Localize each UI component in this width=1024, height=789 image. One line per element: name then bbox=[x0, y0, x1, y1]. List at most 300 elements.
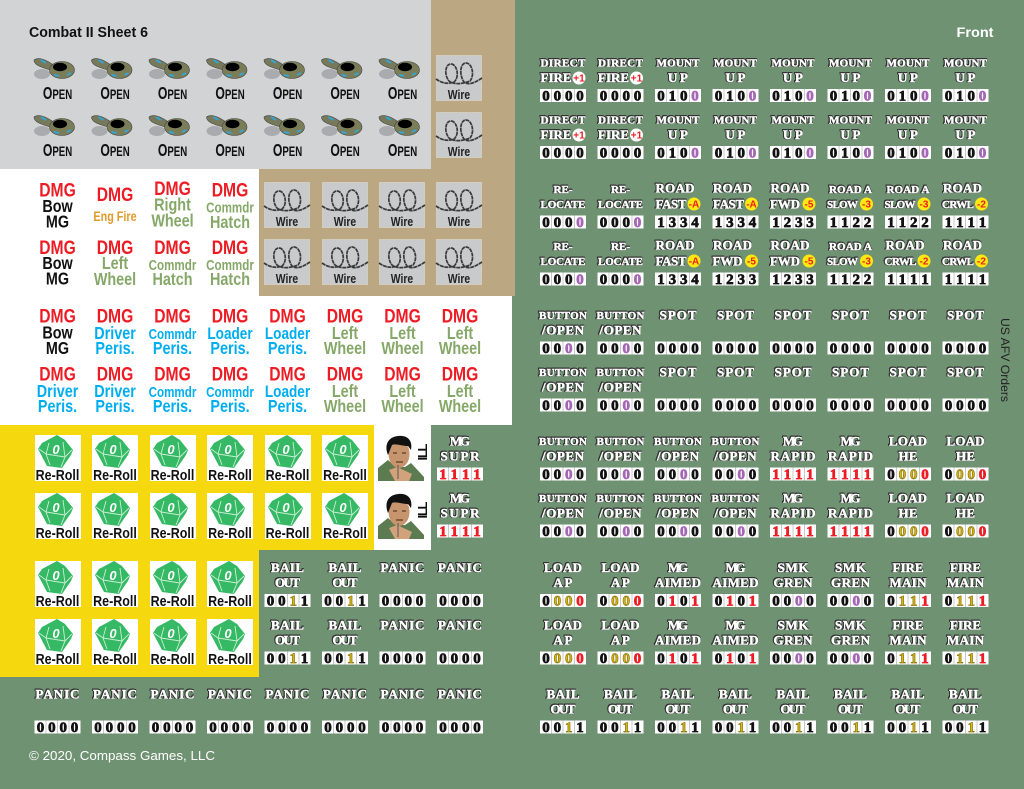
row 10: load AP, MG aimed, smoke, fire main: 0 11 1 bbox=[887, 651, 929, 667]
row 8: button open, MG rapid, load HE: /OPEN bbox=[598, 506, 642, 520]
row 1: direct fire and mount up: 010 0 bbox=[657, 88, 699, 104]
wire counters: Wire bbox=[334, 215, 357, 229]
damage counters: Commdr bbox=[206, 257, 254, 273]
row 1: direct fire and mount up: MOUNT bbox=[829, 58, 873, 70]
panel: gray hatch area bbox=[0, 0, 431, 169]
counter: Bail Out: BAIL bbox=[271, 560, 304, 575]
row 6: button open and spot: 00 0 0 bbox=[542, 398, 584, 414]
row 11: bail out: OUT bbox=[780, 702, 806, 716]
row 11: bail out: BAIL bbox=[546, 686, 580, 702]
row 2: direct fire and mount up: FIRE bbox=[598, 127, 629, 142]
damage counters: DMG bbox=[212, 363, 248, 385]
open hatch counters: OPEN bbox=[158, 141, 187, 161]
row 9: load AP, MG aimed, smoke, fire main: 0 00 0 bbox=[600, 594, 641, 610]
counter: MG Supr bbox=[437, 490, 483, 540]
counter: Panic bbox=[92, 686, 138, 736]
damage counters: DMG bbox=[154, 305, 191, 327]
row 9: load AP, MG aimed, smoke, fire main: LOAD bbox=[544, 560, 582, 575]
row 9: load AP, MG aimed, smoke, fire main: AIMED bbox=[712, 575, 758, 590]
row 11: bail out: 00 1 1 bbox=[542, 720, 584, 736]
wire counters: Wire bbox=[448, 88, 471, 102]
copyright: © 2020, Compass Games, LLC bbox=[29, 748, 215, 763]
row 4: relocate and road movement: 1122 bbox=[830, 272, 871, 288]
row 4: relocate and road movement: ROAD A bbox=[829, 241, 872, 253]
counter: Panic: PANIC bbox=[438, 618, 482, 632]
row 7: button open, MG rapid, load HE: RAPID bbox=[770, 448, 816, 464]
row 11: bail out: 00 1 1 bbox=[715, 720, 756, 736]
damage counters: Left bbox=[447, 324, 474, 343]
row 7: button open, MG rapid, load HE: BUTTON bbox=[596, 436, 645, 448]
damage counters: DMG bbox=[154, 177, 191, 199]
open hatch counters: OPEN bbox=[100, 141, 130, 161]
row 8: button open, MG rapid, load HE: /OPEN bbox=[714, 506, 757, 520]
damage counters: DMG bbox=[154, 236, 191, 258]
row 3: relocate and road movement: RE- bbox=[554, 184, 573, 196]
damage counters: Peris. bbox=[95, 339, 135, 358]
row 9: load AP, MG aimed, smoke, fire main: 00 0 0 bbox=[830, 594, 871, 610]
row 11: bail out: 00 1 1 bbox=[772, 720, 814, 736]
row 3: relocate and road movement: 1334 bbox=[715, 215, 757, 231]
row 3: relocate and road movement: ROAD bbox=[656, 180, 694, 196]
damage counters: Wheel bbox=[381, 397, 424, 416]
row 11: bail out: OUT bbox=[608, 702, 633, 716]
open hatch counters: OPEN bbox=[330, 141, 360, 161]
row 6: button open and spot: 0000 bbox=[830, 398, 871, 414]
damage counters: Left bbox=[332, 382, 359, 401]
row 4: relocate and road movement: ROAD bbox=[656, 238, 694, 252]
counter: Bail Out: OUT bbox=[332, 632, 358, 648]
row 3: relocate and road movement: SLOW bbox=[884, 199, 916, 211]
damage counters: Driver bbox=[94, 324, 136, 343]
wire counters: Wire bbox=[276, 272, 299, 286]
damage counters: DMG bbox=[39, 363, 76, 385]
damage counters: DMG bbox=[327, 305, 363, 327]
row 2: direct fire and mount up: 010 0 bbox=[830, 146, 871, 162]
row 4: relocate and road movement: ROAD bbox=[713, 238, 752, 252]
damage counters: Peris. bbox=[153, 339, 192, 358]
row 10: load AP, MG aimed, smoke, fire main: MG bbox=[726, 618, 746, 632]
counter: Panic: PANIC bbox=[150, 686, 194, 702]
row 7: button open, MG rapid, load HE: /OPEN bbox=[598, 448, 642, 464]
damage counters: Driver bbox=[37, 382, 79, 401]
row 1: direct fire and mount up: MOUNT bbox=[656, 58, 700, 70]
ill crew counters bbox=[378, 435, 430, 539]
row 8: button open, MG rapid, load HE: 1111 bbox=[772, 524, 814, 540]
row 3: relocate and road movement: ROAD A bbox=[886, 184, 930, 196]
row 8: button open, MG rapid, load HE: 00 0 0 bbox=[600, 524, 641, 540]
wire counters: Wire bbox=[448, 272, 471, 286]
row 7: button open, MG rapid, load HE: 00 0 0 bbox=[657, 467, 699, 483]
wire counters: Wire bbox=[334, 272, 357, 286]
row 4: relocate and road movement: SLOW bbox=[827, 256, 858, 268]
row 3: relocate and road movement: ROAD bbox=[713, 180, 752, 196]
row 3: relocate and road movement: -A bbox=[689, 200, 699, 210]
row 2: direct fire and mount up: UP bbox=[840, 127, 861, 142]
counter: Panic: PANIC bbox=[266, 686, 310, 702]
row 4: relocate and road movement: FAST bbox=[656, 254, 687, 268]
row 5: button open and spot: 00 0 0 bbox=[542, 341, 584, 357]
row 11: bail out: OUT bbox=[666, 702, 691, 716]
damage counters: Wheel bbox=[439, 339, 481, 358]
counter: Panic: 0000 bbox=[152, 720, 193, 736]
re-roll counters: Re-Roll bbox=[151, 525, 194, 541]
row 8: button open, MG rapid, load HE: MG bbox=[783, 490, 803, 506]
row 11: bail out: OUT bbox=[550, 702, 576, 716]
row 7: button open, MG rapid, load HE: /OPEN bbox=[541, 448, 585, 464]
row 8: button open, MG rapid, load HE: HE bbox=[956, 506, 975, 520]
damage counters: Wheel bbox=[324, 397, 366, 416]
damage counters: Right bbox=[154, 195, 191, 215]
open hatch counters: OPEN bbox=[215, 84, 245, 104]
row 10: load AP, MG aimed, smoke, fire main: 0 11 1 bbox=[945, 651, 986, 667]
row 9: load AP, MG aimed, smoke, fire main: 0 11 1 bbox=[945, 594, 986, 610]
row 1: direct fire and mount up: MOUNT bbox=[886, 58, 930, 70]
row 9: load AP, MG aimed, smoke, fire main: LOAD bbox=[602, 560, 640, 575]
row 6: button open and spot: SPOT bbox=[774, 364, 812, 380]
row 6: button open and spot: SPOT bbox=[890, 364, 927, 380]
row 3: relocate and road movement: 000 0 bbox=[542, 215, 584, 231]
row 9: load AP, MG aimed, smoke, fire main: 0 11 1 bbox=[887, 594, 929, 610]
row 8: button open, MG rapid, load HE: LOAD bbox=[946, 490, 984, 506]
damage counters bbox=[37, 177, 481, 416]
row 3: relocate and road movement: RE- bbox=[611, 184, 630, 196]
row 1: direct fire and mount up bbox=[540, 58, 988, 104]
counter: Bail Out: OUT bbox=[275, 575, 300, 590]
row 6: button open and spot: SPOT bbox=[660, 364, 697, 380]
damage counters: Left bbox=[389, 382, 416, 401]
row 10: load AP, MG aimed, smoke, fire main: MG bbox=[668, 618, 688, 632]
row 9: load AP, MG aimed, smoke, fire main: AP bbox=[611, 575, 630, 590]
counter: Panic: 0000 bbox=[267, 720, 308, 736]
row 3: relocate and road movement: 1111 bbox=[945, 215, 986, 231]
row 1: direct fire and mount up: FIRE bbox=[598, 70, 629, 85]
re-roll counters: Re-Roll bbox=[93, 467, 137, 483]
row 2: direct fire and mount up: 010 0 bbox=[715, 146, 756, 162]
wire counters: Wire bbox=[391, 272, 414, 286]
damage counters: Commdr bbox=[206, 384, 254, 400]
row 10: load AP, MG aimed, smoke, fire main: AIMED bbox=[655, 632, 701, 648]
damage counters: Commdr bbox=[206, 199, 254, 216]
re-roll counters bbox=[35, 435, 368, 667]
title: Combat II Sheet 6 bbox=[29, 25, 148, 41]
row 1: direct fire and mount up: MOUNT bbox=[944, 58, 988, 70]
row 4: relocate and road movement: FWD bbox=[770, 254, 800, 268]
row 10: load AP, MG aimed, smoke, fire main: 0 00 0 bbox=[542, 651, 584, 667]
row 8: button open, MG rapid, load HE: BUTTON bbox=[712, 493, 760, 505]
panel: white damage area bbox=[0, 169, 512, 425]
row 10: load AP, MG aimed, smoke, fire main: 00 0 0 bbox=[772, 651, 814, 667]
damage counters: Peris. bbox=[153, 397, 192, 416]
row 7: button open, MG rapid, load HE: MG bbox=[840, 434, 860, 448]
open hatch counters: OPEN bbox=[273, 141, 302, 161]
row 5: button open and spot: BUTTON bbox=[539, 310, 587, 322]
row 7: button open, MG rapid, load HE: BUTTON bbox=[712, 436, 760, 448]
damage counters: Bow bbox=[42, 197, 73, 216]
counter: Panic: 0000 bbox=[382, 651, 423, 667]
row 11: bail out: 00 1 1 bbox=[945, 720, 986, 736]
row 4: relocate and road movement bbox=[540, 238, 988, 288]
row 1: direct fire and mount up: 010 0 bbox=[945, 88, 986, 104]
row 3: relocate and road movement: LOCATE bbox=[598, 199, 643, 211]
side label: US AFV Orders: US AFV Orders bbox=[998, 318, 1012, 402]
row 3: relocate and road movement: FWD bbox=[770, 196, 800, 212]
re-roll counters: Re-Roll bbox=[93, 525, 137, 541]
row 5: button open and spot: /OPEN bbox=[598, 322, 642, 338]
row 10: load AP, MG aimed, smoke, fire main: FIRE bbox=[892, 618, 924, 632]
row 3: relocate and road movement: 1122 bbox=[887, 215, 929, 231]
row 4: relocate and road movement: RE- bbox=[554, 241, 573, 253]
row 3: relocate and road movement: ROAD A bbox=[829, 184, 872, 196]
counter: Bail Out bbox=[264, 560, 310, 610]
row 1: direct fire and mount up: UP bbox=[840, 70, 861, 85]
row 1: direct fire and mount up: UP bbox=[956, 70, 976, 85]
counter: Panic: 0000 bbox=[37, 720, 78, 736]
wire counters: Wire bbox=[448, 145, 471, 159]
counter: Panic: PANIC bbox=[323, 686, 367, 702]
row 3: relocate and road movement: FAST bbox=[656, 196, 687, 212]
re-roll counters: Re-Roll bbox=[36, 525, 79, 541]
row 4: relocate and road movement: -2 bbox=[977, 256, 986, 268]
counter: MG Supr: MG bbox=[450, 490, 470, 506]
row 2: direct fire and mount up: +1 bbox=[631, 130, 643, 142]
counter: Panic: 0000 bbox=[382, 594, 423, 610]
row 4: relocate and road movement: ROAD bbox=[770, 238, 810, 252]
damage counters: Left bbox=[332, 324, 359, 343]
counter: Bail Out: BAIL bbox=[328, 560, 362, 575]
damage counters: Peris. bbox=[210, 339, 250, 358]
counter: Panic: 0000 bbox=[439, 720, 481, 736]
counter: Panic: PANIC bbox=[438, 686, 482, 702]
damage counters: Hatch bbox=[153, 270, 192, 289]
re-roll counters: Re-Roll bbox=[151, 467, 194, 483]
row 2: direct fire and mount up: MOUNT bbox=[714, 114, 758, 126]
row 9: load AP, MG aimed, smoke, fire main: FIRE bbox=[892, 560, 924, 575]
damage counters: MG bbox=[46, 212, 69, 232]
row 4: relocate and road movement: 1334 bbox=[657, 272, 699, 288]
row 9: load AP, MG aimed, smoke, fire main bbox=[540, 560, 988, 610]
counter: Panic: PANIC bbox=[380, 686, 424, 702]
row 6: button open and spot: 0000 bbox=[715, 398, 756, 414]
row 4: relocate and road movement: CRWL bbox=[884, 256, 916, 268]
row 5: button open and spot: SPOT bbox=[660, 308, 697, 322]
row 6: button open and spot bbox=[539, 364, 988, 414]
row 7: button open, MG rapid, load HE: 1111 bbox=[772, 467, 814, 483]
row 11: bail out: BAIL bbox=[776, 686, 810, 702]
row 5: button open and spot: SPOT bbox=[947, 308, 984, 322]
counter: Bail Out: 00 1 1 bbox=[267, 594, 308, 610]
row 10: load AP, MG aimed, smoke, fire main: 0 00 0 bbox=[600, 651, 641, 667]
row 8: button open, MG rapid, load HE bbox=[539, 490, 988, 540]
re-roll counters: Re-Roll bbox=[151, 593, 194, 609]
row 4: relocate and road movement: 000 0 bbox=[600, 272, 641, 288]
row 8: button open, MG rapid, load HE: /OPEN bbox=[656, 506, 700, 520]
row 2: direct fire and mount up: FIRE bbox=[540, 127, 572, 142]
row 11: bail out: OUT bbox=[838, 702, 863, 716]
row 8: button open, MG rapid, load HE: 0 00 0 bbox=[887, 524, 929, 540]
row 2: direct fire and mount up: UP bbox=[956, 127, 976, 142]
counter: Panic: PANIC bbox=[380, 560, 424, 575]
row 7: button open, MG rapid, load HE: 00 0 0 bbox=[600, 467, 641, 483]
row 9: load AP, MG aimed, smoke, fire main: AIMED bbox=[655, 575, 701, 590]
row 7: button open, MG rapid, load HE: 00 0 0 bbox=[542, 467, 584, 483]
counter: Panic: PANIC bbox=[438, 560, 482, 575]
damage counters: MG bbox=[46, 269, 69, 289]
re-roll counters: Re-Roll bbox=[36, 593, 79, 609]
damage counters: DMG bbox=[384, 363, 421, 385]
row 11: bail out: BAIL bbox=[604, 686, 637, 702]
re-roll counters: Re-Roll bbox=[208, 651, 252, 667]
row 10: load AP, MG aimed, smoke, fire main: AIMED bbox=[712, 632, 758, 648]
damage counters: Bow bbox=[42, 323, 73, 343]
counter: Panic bbox=[150, 686, 196, 736]
row 10: load AP, MG aimed, smoke, fire main: SMK bbox=[835, 618, 867, 632]
row 4: relocate and road movement: CRWL bbox=[942, 256, 974, 268]
wire counters: Wire bbox=[391, 215, 414, 229]
counter: Bail Out: BAIL bbox=[328, 618, 362, 632]
damage counters: Hatch bbox=[210, 213, 250, 232]
damage counters: DMG bbox=[97, 305, 133, 327]
damage counters: Commdr bbox=[149, 384, 196, 400]
open hatch counters: OPEN bbox=[388, 141, 417, 161]
row 7: button open, MG rapid, load HE bbox=[539, 434, 988, 483]
row 11: bail out bbox=[540, 686, 988, 736]
left sheet order counters bbox=[34, 434, 483, 736]
row 4: relocate and road movement: FWD bbox=[712, 254, 742, 268]
row 11: bail out: BAIL bbox=[834, 686, 867, 702]
damage counters: Peris. bbox=[268, 397, 307, 416]
row 8: button open, MG rapid, load HE: 00 0 0 bbox=[715, 524, 756, 540]
row 6: button open and spot: BUTTON bbox=[596, 367, 645, 379]
row 7: button open, MG rapid, load HE: /OPEN bbox=[656, 448, 700, 464]
counter: Panic: PANIC bbox=[208, 686, 252, 702]
damage counters: DMG bbox=[327, 363, 363, 385]
damage counters: Wheel bbox=[94, 270, 136, 289]
row 5: button open and spot: SPOT bbox=[832, 308, 869, 322]
row 9: load AP, MG aimed, smoke, fire main: AP bbox=[554, 575, 573, 590]
row 2: direct fire and mount up: MOUNT bbox=[944, 114, 988, 126]
row 9: load AP, MG aimed, smoke, fire main: 0 00 0 bbox=[542, 594, 584, 610]
row 3: relocate and road movement: -2 bbox=[977, 200, 986, 210]
row 1: direct fire and mount up: DIRECT bbox=[540, 58, 586, 70]
row 3: relocate and road movement: LOCATE bbox=[540, 199, 586, 211]
damage counters: Wheel bbox=[151, 211, 194, 231]
re-roll counters: Re-Roll bbox=[323, 467, 367, 483]
row 3: relocate and road movement: -3 bbox=[920, 200, 929, 210]
row 10: load AP, MG aimed, smoke, fire main: 0 1 0 1 bbox=[657, 651, 699, 667]
row 10: load AP, MG aimed, smoke, fire main: SMK bbox=[778, 618, 809, 632]
row 6: button open and spot: SPOT bbox=[832, 364, 869, 380]
damage counters: Hatch bbox=[210, 270, 250, 289]
counter: Panic: 0000 bbox=[324, 720, 366, 736]
row 7: button open, MG rapid, load HE: LOAD bbox=[889, 434, 927, 448]
row 4: relocate and road movement: -3 bbox=[862, 256, 871, 268]
row 2: direct fire and mount up: MOUNT bbox=[886, 114, 930, 126]
row 9: load AP, MG aimed, smoke, fire main: SMK bbox=[778, 560, 809, 575]
row 1: direct fire and mount up: +1 bbox=[573, 74, 585, 84]
row 3: relocate and road movement: 1122 bbox=[830, 215, 871, 231]
row 1: direct fire and mount up: 0000 bbox=[600, 88, 641, 104]
row 5: button open and spot: 0000 bbox=[715, 341, 756, 357]
row 5: button open and spot: /OPEN bbox=[541, 322, 585, 338]
damage counters: Left bbox=[389, 324, 416, 343]
re-roll counters: Re-Roll bbox=[93, 651, 137, 667]
row 10: load AP, MG aimed, smoke, fire main: AP bbox=[554, 632, 573, 648]
counter: Panic bbox=[207, 686, 253, 736]
row 1: direct fire and mount up: UP bbox=[898, 70, 918, 85]
row 8: button open, MG rapid, load HE: 00 0 0 bbox=[542, 524, 584, 540]
counter: MG Supr: 1111 bbox=[439, 467, 481, 483]
counter: Panic bbox=[380, 618, 426, 667]
row 11: bail out: BAIL bbox=[719, 686, 752, 702]
row 8: button open, MG rapid, load HE: /OPEN bbox=[541, 506, 585, 520]
row 2: direct fire and mount up: 010 0 bbox=[887, 146, 929, 162]
row 1: direct fire and mount up: UP bbox=[726, 70, 746, 85]
damage counters: DMG bbox=[212, 305, 248, 327]
counter: Panic: PANIC bbox=[36, 686, 80, 702]
counter: Bail Out: OUT bbox=[332, 575, 358, 590]
row 1: direct fire and mount up: MOUNT bbox=[714, 58, 758, 70]
row 9: load AP, MG aimed, smoke, fire main: GREN bbox=[774, 575, 813, 590]
open hatch counters: OPEN bbox=[215, 141, 245, 161]
open hatch counters: OPEN bbox=[43, 141, 72, 161]
row 11: bail out: 00 1 1 bbox=[887, 720, 929, 736]
row 4: relocate and road movement: -2 bbox=[920, 256, 929, 268]
damage counters: Peris. bbox=[38, 397, 77, 416]
row 1: direct fire and mount up: 010 0 bbox=[715, 88, 756, 104]
damage counters: DMG bbox=[97, 363, 133, 385]
damage counters: DMG bbox=[269, 363, 306, 385]
damage counters: Left bbox=[102, 254, 129, 273]
row 4: relocate and road movement: ROAD bbox=[943, 238, 982, 252]
row 2: direct fire and mount up: 010 0 bbox=[657, 146, 699, 162]
row 8: button open, MG rapid, load HE: MG bbox=[840, 490, 860, 506]
damage counters: DMG bbox=[39, 236, 76, 258]
counter: MG Supr: SUPR bbox=[440, 506, 480, 520]
row 11: bail out: 00 1 1 bbox=[600, 720, 641, 736]
open hatch counters: OPEN bbox=[330, 84, 360, 104]
row 2: direct fire and mount up: 0000 bbox=[600, 146, 641, 162]
re-roll counters: Re-Roll bbox=[93, 593, 137, 609]
row 7: button open, MG rapid, load HE: 0 00 0 bbox=[945, 467, 986, 483]
re-roll counters: Re-Roll bbox=[266, 467, 309, 483]
row 6: button open and spot: BUTTON bbox=[539, 367, 587, 379]
row 2: direct fire and mount up: 010 0 bbox=[945, 146, 986, 162]
row 7: button open, MG rapid, load HE: 0 00 0 bbox=[887, 467, 929, 483]
row 1: direct fire and mount up: UP bbox=[668, 70, 688, 85]
row 2: direct fire and mount up: UP bbox=[726, 127, 746, 142]
row 4: relocate and road movement: 000 0 bbox=[542, 272, 584, 288]
row 9: load AP, MG aimed, smoke, fire main: 0 1 0 1 bbox=[715, 594, 756, 610]
damage counters: Eng Fire bbox=[93, 209, 137, 224]
row 10: load AP, MG aimed, smoke, fire main: GREN bbox=[831, 632, 871, 648]
row 7: button open, MG rapid, load HE: BUTTON bbox=[654, 436, 702, 448]
damage counters: Loader bbox=[207, 325, 253, 343]
counter: Panic bbox=[380, 686, 426, 736]
row 8: button open, MG rapid, load HE: RAPID bbox=[828, 506, 873, 520]
row 11: bail out: OUT bbox=[723, 702, 748, 716]
counter: Panic: 0000 bbox=[209, 720, 251, 736]
damage counters: DMG bbox=[39, 179, 76, 201]
row 11: bail out: BAIL bbox=[892, 686, 925, 702]
re-roll counters: Re-Roll bbox=[36, 651, 79, 667]
row 2: direct fire and mount up: MOUNT bbox=[772, 114, 815, 126]
counter: Panic: PANIC bbox=[380, 618, 424, 632]
row 4: relocate and road movement: LOCATE bbox=[540, 256, 586, 268]
row 11: bail out: OUT bbox=[953, 702, 978, 716]
row 1: direct fire and mount up: UP bbox=[783, 70, 803, 85]
row 3: relocate and road movement: -3 bbox=[862, 200, 871, 210]
row 5: button open and spot bbox=[539, 308, 988, 357]
